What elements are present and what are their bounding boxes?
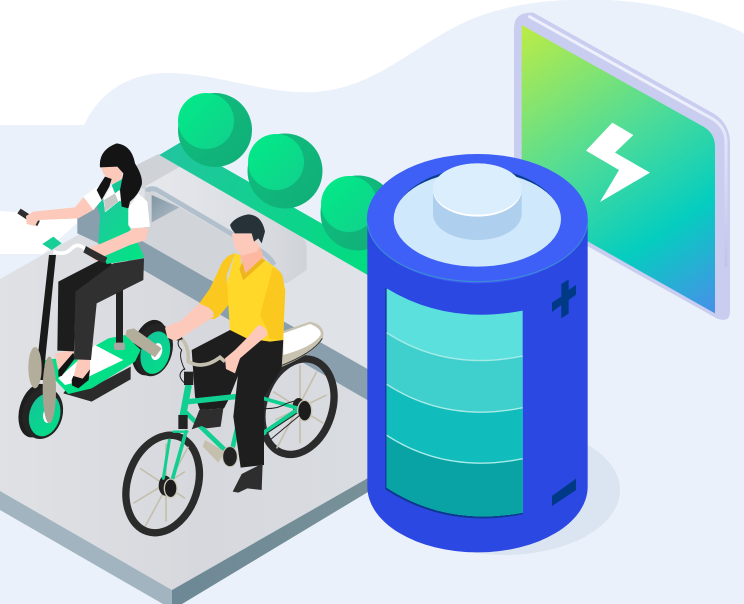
woman face	[101, 166, 123, 184]
scooter handlebar	[17, 209, 86, 253]
arch opening	[152, 195, 179, 222]
icon: lightning bolt	[586, 123, 650, 202]
frame highlight	[528, 16, 726, 267]
man far leg	[192, 330, 242, 410]
man right sleeve	[260, 268, 285, 340]
scooter steering pole	[38, 255, 56, 380]
walkway wall	[77, 198, 368, 401]
man right shoe	[233, 463, 263, 493]
walkway top	[97, 155, 368, 369]
man upper body	[165, 214, 285, 373]
arch inner rim	[147, 189, 274, 265]
woman left foot	[55, 350, 75, 377]
man near leg	[220, 330, 283, 468]
floor right edge	[172, 478, 368, 604]
cap rim line	[367, 223, 588, 282]
woman right arm	[88, 228, 148, 262]
hedge base strip	[159, 143, 368, 275]
battery ground shadow	[390, 425, 620, 555]
gradient screen	[522, 25, 715, 313]
bicycle frame	[163, 387, 300, 478]
cap inner shadow	[394, 168, 561, 217]
man right arm	[225, 325, 267, 373]
bicycle lower parts	[114, 322, 346, 542]
rear wheel	[250, 349, 346, 464]
man left arm	[165, 303, 214, 341]
arch block	[145, 167, 307, 280]
floor top surface	[0, 200, 368, 590]
man left sleeve	[199, 253, 235, 319]
hedge ball 3	[320, 176, 396, 250]
battery cap	[367, 154, 588, 283]
scooter seat post	[114, 287, 125, 350]
scooter grip	[83, 246, 107, 263]
walkway rear surface	[137, 154, 183, 190]
man collar	[239, 258, 265, 280]
battery body	[367, 219, 588, 552]
floor platform	[0, 200, 368, 604]
battery top surface	[394, 171, 561, 267]
scooter rear wheel	[125, 316, 179, 381]
woman hair	[97, 143, 142, 208]
woman right foot	[72, 357, 90, 388]
charging panel	[514, 13, 730, 320]
raised walkway	[77, 155, 368, 401]
woman sleeves	[83, 183, 150, 228]
woman collar	[103, 178, 123, 212]
woman vest	[95, 198, 144, 264]
white panel at left	[0, 211, 77, 254]
front hub	[164, 479, 177, 498]
bicycle chain guard and crank	[203, 400, 300, 467]
man neck	[240, 247, 264, 274]
battery terminal side	[433, 190, 522, 240]
scooter front wheel	[13, 347, 69, 444]
scooter deck underside	[63, 367, 131, 402]
battery terminal top	[433, 163, 522, 217]
charge window	[385, 287, 523, 518]
plus sign	[552, 279, 576, 318]
woman left thigh	[57, 257, 113, 351]
hedge ball 1	[178, 93, 252, 167]
woman on scooter	[17, 197, 144, 360]
man hair	[230, 214, 265, 243]
scooter	[13, 255, 179, 444]
bicycle seat	[278, 322, 323, 368]
lower recess surface	[143, 187, 307, 283]
hedge	[159, 143, 368, 275]
man face	[232, 233, 260, 256]
woman left arm	[26, 197, 95, 226]
battery	[367, 154, 588, 552]
minus sign	[552, 479, 576, 506]
front wheel	[114, 426, 211, 542]
scooter deck plate	[58, 345, 123, 385]
man left shoe	[192, 408, 223, 429]
floor left edge	[0, 491, 172, 604]
man sweater	[218, 253, 285, 342]
scooter deck	[38, 335, 141, 394]
hedge ball 2	[248, 134, 322, 208]
woman legs lower	[58, 297, 75, 350]
rear hub	[298, 400, 312, 421]
woman right leg	[74, 258, 144, 360]
panel frame	[514, 13, 730, 320]
bicycle handlebar and head tube	[174, 333, 241, 429]
